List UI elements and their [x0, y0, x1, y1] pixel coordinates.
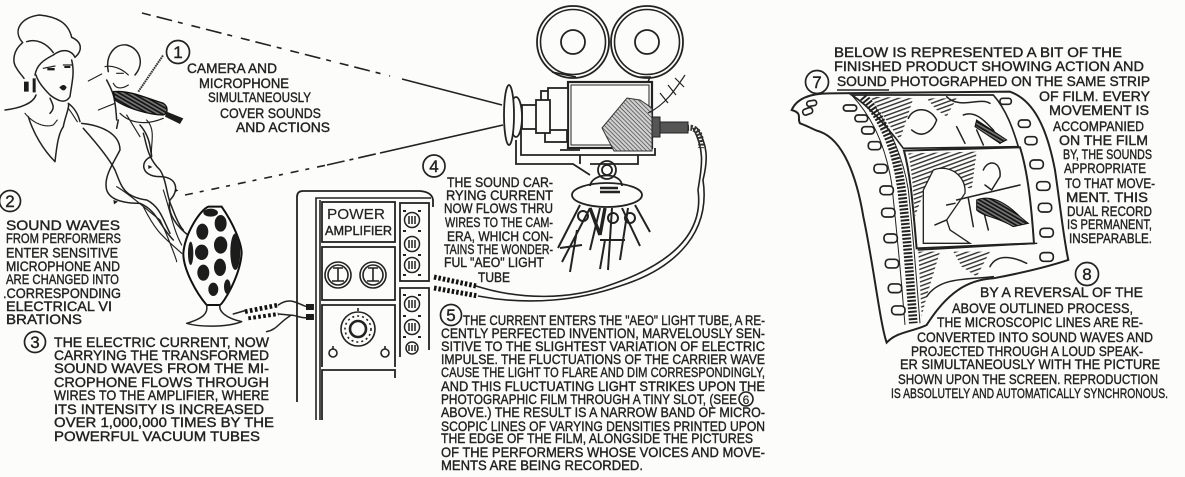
caption 4: THE SOUND CAR-	[447, 175, 553, 190]
number 3 badge	[24, 332, 46, 352]
caption 4: WIRES TO THE CAM-	[445, 215, 553, 230]
caption 3: WIRES TO THE AMPLIFIER, WHERE	[54, 388, 269, 403]
caption 7: TO THAT MOVE-	[1065, 176, 1155, 191]
rear connector	[652, 117, 688, 137]
caption 5: ABOVE.) THE RESULT IS A NARROW BAND OF MICRO-	[441, 405, 765, 420]
caption 8: PROJECTED THROUGH A LOUD SPEAK-	[911, 344, 1143, 359]
caption 7: FINISHED PRODUCT SHOWING ACTION AND	[834, 59, 1144, 74]
lens assembly	[504, 85, 568, 145]
film reels	[537, 6, 683, 82]
power label panel: AMPLIFIER	[325, 224, 392, 238]
caption 7: DUAL RECORD	[1067, 204, 1152, 219]
caption 8: BY A REVERSAL OF THE	[980, 285, 1143, 300]
middle frame	[904, 147, 1034, 248]
caption 7: APPROPRIATE	[1064, 161, 1146, 176]
caption 2: ARE CHANGED INTO	[6, 272, 119, 287]
caption 5	[441, 313, 765, 473]
number 2 badge	[0, 190, 20, 212]
strip outline	[792, 92, 1068, 343]
caption 7: SOUND PHOTOGRAPHED ON THE SAME STRIP	[837, 74, 1150, 89]
power amplifier cabinet	[297, 191, 433, 420]
caption 8: CONVERTED INTO SOUND WAVES AND	[917, 330, 1153, 345]
number 7 badge: 7	[812, 73, 822, 92]
caption 4	[444, 175, 553, 285]
caption 4: RYING CURRENT	[446, 188, 553, 203]
wires from microphone to amplifier	[233, 301, 314, 332]
caption 7: OF FILM. EVERY	[1039, 89, 1150, 104]
number 3 badge: 3	[30, 333, 40, 352]
caption 1: MICROPHONE	[199, 76, 289, 91]
caption 8	[891, 285, 1168, 401]
caption 3	[54, 335, 274, 444]
number 8 badge	[1076, 262, 1098, 286]
caption 7: ACCOMPANIED	[1053, 119, 1144, 134]
film strip	[792, 92, 1068, 343]
caption 5: CAUSE THE LIGHT TO FLARE AND DIM CORRESPONDINGLY,	[441, 365, 765, 380]
vacuum tubes	[400, 203, 429, 357]
caption 3: ITS INTENSITY IS INCREASED	[54, 402, 264, 417]
caption 2: .CORRESPONDING	[3, 286, 121, 301]
caption 2: SOUND WAVES	[6, 218, 120, 233]
movie camera	[504, 6, 688, 272]
microphone	[117, 187, 242, 326]
caption 4: ERA, WHICH CON-	[447, 229, 553, 244]
caption 8: THE MICROSCOPIC LINES ARE RE-	[937, 315, 1143, 330]
number 1 badge	[166, 40, 190, 64]
number 5 badge	[440, 304, 462, 326]
caption 2: MICROPHONE AND	[6, 259, 120, 274]
meter panel	[322, 247, 395, 300]
power label panel	[322, 202, 395, 242]
caption 7: MENT. THIS	[1066, 190, 1148, 205]
caption 4: TAINS THE WONDER-	[444, 242, 553, 257]
mount and head	[516, 130, 655, 207]
sound waves flowing to microphone	[82, 123, 190, 240]
bottom frame scene	[918, 243, 1037, 317]
caption 8: ER SIMULTANEOUSLY WITH THE PICTURE	[900, 357, 1160, 372]
wires from amplifier to camera	[434, 128, 706, 301]
caption 1: AND ACTIONS	[236, 120, 330, 135]
caption 5: OF THE PERFORMERS WHOSE VOICES AND MOVE-	[441, 445, 765, 460]
caption 4: TUBE	[478, 270, 510, 285]
number 5 badge: 5	[446, 306, 456, 325]
number 4 badge: 4	[429, 157, 439, 176]
caption 5: MENTS ARE BEING RECORDED.	[441, 458, 643, 473]
caption 7: IS PERMANENT,	[1067, 217, 1152, 232]
caption 3: THE ELECTRIC CURRENT, NOW	[54, 335, 269, 350]
caption 4: FUL "AEO" LIGHT	[444, 255, 544, 270]
caption 1: SIMULTANEOUSLY	[208, 90, 311, 105]
caption 5: SITIVE TO THE SLIGHTEST VARIATION OF ELECTRIC	[441, 339, 765, 354]
number 6 reference badge	[739, 392, 753, 407]
caption 1: COVER SOUNDS	[220, 106, 321, 121]
caption 5: THE CURRENT ENTERS THE "AEO" LIGHT TUBE, A RE-	[463, 313, 765, 328]
caption 7: BY, THE SOUNDS	[1063, 147, 1152, 162]
caption 1: CAMERA AND	[187, 61, 277, 76]
number 2 badge: 2	[5, 192, 15, 211]
dashed sight lines from performers to camera	[142, 13, 503, 195]
caption 2: FROM PERFORMERS	[6, 231, 121, 246]
caption 5: PHOTOGRAPHIC FILM THROUGH A TINY SLOT, (SEE	[441, 392, 737, 407]
tripod legs	[558, 205, 650, 272]
illustration: violinist	[88, 45, 183, 155]
number 7 badge	[806, 70, 828, 94]
top frame	[852, 95, 1018, 148]
light tube shaded area	[602, 98, 652, 151]
caption 3: POWERFUL VACUUM TUBES	[54, 429, 260, 444]
caption 7: MOVEMENT IS	[1049, 103, 1149, 118]
caption 5: CENTLY PERFECTED INVENTION, MARVELOUSLY SEN-	[441, 326, 765, 341]
sound track	[863, 97, 913, 323]
caption 5: AND THIS FLUCTUATING LIGHT STRIKES UPON THE	[441, 379, 765, 394]
caption 7	[834, 45, 1155, 246]
slot indicator	[648, 75, 685, 113]
dial panel	[322, 305, 395, 420]
power label panel: POWER	[327, 206, 385, 223]
inner frame	[316, 198, 431, 420]
cabinet frame	[297, 191, 433, 402]
caption 3: SOUND WAVES FROM THE MI-	[54, 361, 269, 376]
number 4 badge	[423, 155, 445, 177]
caption 3: OVER 1,000,000 TIMES BY THE	[54, 415, 274, 430]
caption 3: CARRYING THE TRANSFORMED	[54, 348, 269, 363]
camera body	[568, 82, 652, 148]
caption 7: BELOW IS REPRESENTED A BIT OF THE	[834, 45, 1122, 60]
number 1 badge: 1	[173, 43, 183, 62]
number 6 reference badge: 6	[743, 393, 750, 407]
perforations	[802, 98, 1053, 315]
caption 7: INSEPARABLE.	[1069, 231, 1152, 246]
caption 7: ON THE FILM	[1059, 133, 1148, 148]
caption 8: ABOVE OUTLINED PROCESS,	[952, 301, 1133, 316]
caption 5: SCOPIC LINES OF VARYING DENSITIES PRINTED UPON	[441, 419, 765, 434]
caption 1	[187, 61, 330, 135]
caption 5: IMPULSE. THE FLUCTUATIONS OF THE CARRIER WAVE	[441, 352, 765, 367]
illustration: singer	[5, 15, 80, 162]
caption 2: ENTER SENSITIVE	[6, 246, 118, 260]
caption 2: ELECTRICAL VI	[6, 299, 112, 314]
caption 5: THE EDGE OF THE FILM, ALONGSIDE THE PICTURES	[441, 431, 753, 446]
caption 4: NOW FLOWS THRU	[444, 201, 553, 216]
caption 3: CROPHONE FLOWS THROUGH	[54, 375, 269, 390]
number 8 badge: 8	[1082, 265, 1092, 284]
caption 2: BRATIONS	[6, 312, 82, 327]
caption 2	[3, 218, 121, 327]
